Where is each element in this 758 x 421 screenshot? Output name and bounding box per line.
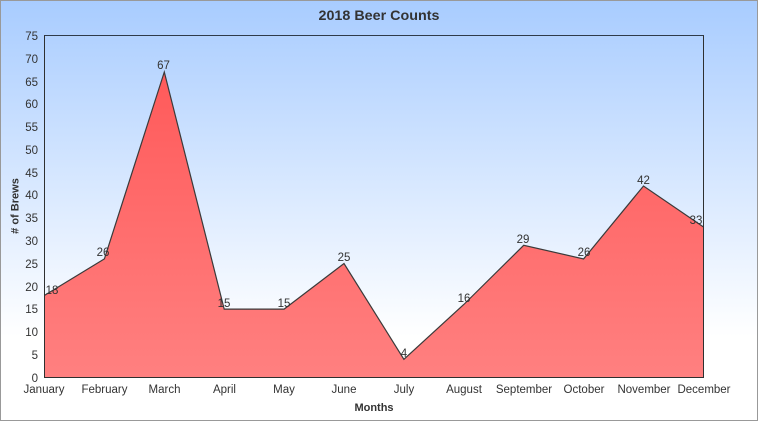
y axis tick labels: 0 [32, 373, 38, 385]
data value labels: 26 [578, 247, 590, 259]
x axis month labels: May [273, 384, 295, 396]
x axis month labels: July [394, 384, 414, 396]
data value labels [46, 60, 702, 360]
x axis month labels: June [332, 384, 356, 396]
y axis tick labels: 15 [25, 304, 38, 316]
x axis month labels: March [149, 384, 180, 396]
y axis tick labels: 65 [25, 77, 38, 89]
y axis tick labels: 5 [32, 350, 38, 362]
y axis tick labels: 35 [25, 213, 38, 225]
y axis tick labels: 45 [25, 168, 38, 180]
title: 2018 Beer Counts [318, 8, 440, 23]
data value labels: 15 [218, 298, 230, 310]
x axis month labels: September [496, 384, 552, 396]
data value labels: 29 [517, 234, 529, 246]
x axis month labels [24, 384, 731, 396]
x axis month labels: January [24, 384, 65, 396]
data value labels: 26 [97, 247, 109, 259]
x axis month labels: October [564, 384, 605, 396]
y axis tick labels: 10 [25, 327, 38, 339]
plot axes [44, 36, 704, 378]
x axis month labels: February [81, 384, 128, 396]
area series: monthly brews [44, 72, 704, 378]
y axis tick labels [25, 31, 38, 385]
x axis month labels: April [213, 384, 236, 396]
x axis month labels: August [446, 384, 483, 396]
data value labels: 16 [458, 293, 470, 305]
y axis tick labels: 70 [25, 54, 38, 66]
y axis tick labels: 20 [25, 282, 38, 294]
y axis tick labels: 25 [25, 259, 38, 271]
y axis tick labels: 60 [25, 99, 38, 111]
y axis tick labels: 55 [25, 122, 38, 134]
y axis tick labels: 50 [25, 145, 38, 157]
y axis title: # of Brews [10, 178, 22, 234]
plot frame [44, 36, 704, 378]
data value labels: 42 [637, 175, 650, 187]
data value labels: 4 [401, 348, 408, 360]
data value labels: 25 [338, 252, 350, 264]
y axis tick labels: 40 [25, 190, 38, 202]
y axis tick labels: 75 [25, 31, 38, 43]
x axis month labels: December [677, 384, 731, 396]
data value labels: 18 [46, 285, 58, 297]
data value labels: 67 [157, 60, 170, 72]
x axis title: Months [354, 402, 394, 414]
data value labels: 15 [278, 298, 290, 310]
y axis tick labels: 30 [25, 236, 38, 248]
x axis month labels: November [617, 384, 671, 396]
data value labels: 33 [690, 215, 702, 227]
area series outline [44, 72, 704, 359]
